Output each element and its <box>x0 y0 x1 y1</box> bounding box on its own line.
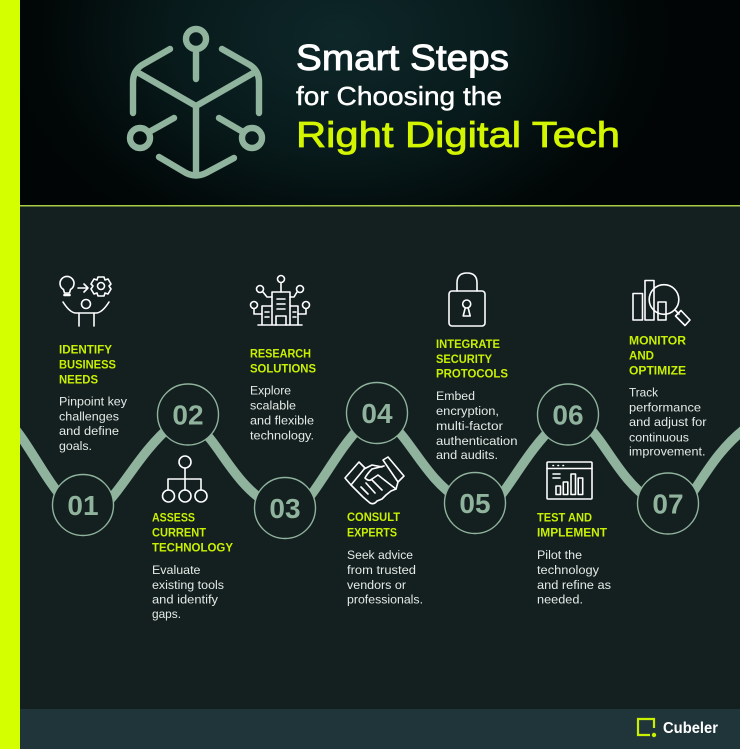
icon: network cube logo <box>130 29 262 176</box>
step 5 heading: SECURITY <box>436 353 492 366</box>
icon: handshake <box>345 457 404 504</box>
step 4 text: vendors or <box>347 578 406 592</box>
step 1 heading: NEEDS <box>59 373 98 386</box>
step 3 heading <box>250 348 316 376</box>
step 6 text <box>537 548 611 607</box>
step 3 text: Explore <box>250 384 291 398</box>
icon: bar chart with magnifier <box>633 280 690 326</box>
step 3 text: technology. <box>250 428 314 442</box>
step 6 heading: IMPLEMENT <box>537 527 607 540</box>
step 05 number: 05 <box>459 488 491 519</box>
step 6 text: needed. <box>537 593 583 607</box>
step 3 heading: SOLUTIONS <box>250 363 316 376</box>
icon: idea to gear with person <box>60 276 111 326</box>
step 03 number: 03 <box>269 493 301 524</box>
step 7 text: and adjust for <box>629 415 706 429</box>
icon: dashboard window <box>547 462 592 499</box>
step 5 text: multi-factor <box>436 419 503 433</box>
icon: padlock <box>449 273 485 326</box>
step 7 text: Track <box>629 386 659 400</box>
step 1 text: goals. <box>59 439 92 453</box>
icon: hierarchy tree <box>162 456 207 502</box>
step 4 text <box>347 548 423 607</box>
step 2 text: existing tools <box>152 578 224 592</box>
step 06 number <box>538 384 598 445</box>
header band <box>0 0 740 205</box>
step 3 text: scalable <box>250 399 296 413</box>
step 4 text: professionals. <box>347 593 423 607</box>
step 7 heading: OPTIMIZE <box>629 364 686 377</box>
step 6 text: technology <box>537 563 600 577</box>
step 5 heading: PROTOCOLS <box>436 368 508 381</box>
step 5 text: Embed <box>436 389 475 403</box>
step 7 heading <box>629 335 687 377</box>
step 7 heading: AND <box>629 350 654 363</box>
step 7 text <box>629 386 706 459</box>
step 2 text <box>152 563 224 621</box>
step 2 heading: TECHNOLOGY <box>152 542 233 555</box>
step 2 heading <box>152 512 233 555</box>
brand logo: Cubeler <box>638 719 718 737</box>
step 02 number <box>158 384 218 445</box>
step 01 number: 01 <box>67 490 99 521</box>
step 5 text: encryption, <box>436 404 499 418</box>
title: for Choosing the <box>296 81 502 111</box>
step 4 heading: EXPERTS <box>347 527 397 540</box>
step 4 heading <box>347 511 400 540</box>
step 07 number <box>638 473 698 534</box>
icon: connected building <box>250 276 310 325</box>
step 07 number: 07 <box>652 488 684 520</box>
step 2 text: and identify <box>152 592 219 606</box>
step 1 heading: IDENTIFY <box>59 343 112 356</box>
step 6 heading <box>537 512 607 540</box>
step 6 text: Pilot the <box>537 548 582 562</box>
step 7 text: continuous <box>629 430 689 444</box>
step 5 heading: INTEGRATE <box>436 338 500 351</box>
step 2 heading: CURRENT <box>152 527 206 540</box>
step 4 heading: CONSULT <box>347 511 400 524</box>
step 1 text <box>59 395 128 453</box>
wave timeline <box>10 423 740 508</box>
step 6 text: and refine as <box>537 578 611 592</box>
step 2 text: Evaluate <box>152 563 201 577</box>
step 4 text: from trusted <box>347 563 416 577</box>
step 06 number: 06 <box>552 400 584 430</box>
step 1 heading <box>59 343 116 386</box>
step 04 number <box>346 382 408 444</box>
step 02 number: 02 <box>172 400 204 430</box>
step 04 number: 04 <box>361 398 393 429</box>
step 1 text: challenges <box>59 409 119 423</box>
step 05 number <box>444 472 506 534</box>
brand logo: Cubeler: Cubeler <box>663 720 718 737</box>
step 6 heading: TEST AND <box>537 512 592 525</box>
step 2 heading: ASSESS <box>152 512 195 525</box>
step 7 text: performance <box>629 401 701 415</box>
title: Smart Steps <box>296 37 509 78</box>
step 3 text: and flexible <box>250 414 314 428</box>
step 5 text: authentication <box>436 434 518 448</box>
step 1 heading: BUSINESS <box>59 358 116 371</box>
step 1 text: Pinpoint key <box>59 395 128 409</box>
step 7 heading: MONITOR <box>629 335 687 348</box>
title: Right Digital Tech <box>296 114 620 155</box>
step 4 text: Seek advice <box>347 548 413 562</box>
footer band <box>0 709 740 749</box>
step 3 text <box>250 384 314 442</box>
step 5 text: and audits. <box>436 448 498 462</box>
step 2 text: gaps. <box>152 607 181 621</box>
step 5 heading <box>436 338 508 381</box>
title <box>296 37 620 155</box>
step 01 number <box>52 474 114 536</box>
step 5 text <box>436 389 518 462</box>
left accent bar <box>0 0 20 749</box>
step 3 heading: RESEARCH <box>250 348 311 361</box>
step 1 text: and define <box>59 424 119 438</box>
step 7 text: improvement. <box>629 445 706 459</box>
step 03 number <box>254 478 316 538</box>
